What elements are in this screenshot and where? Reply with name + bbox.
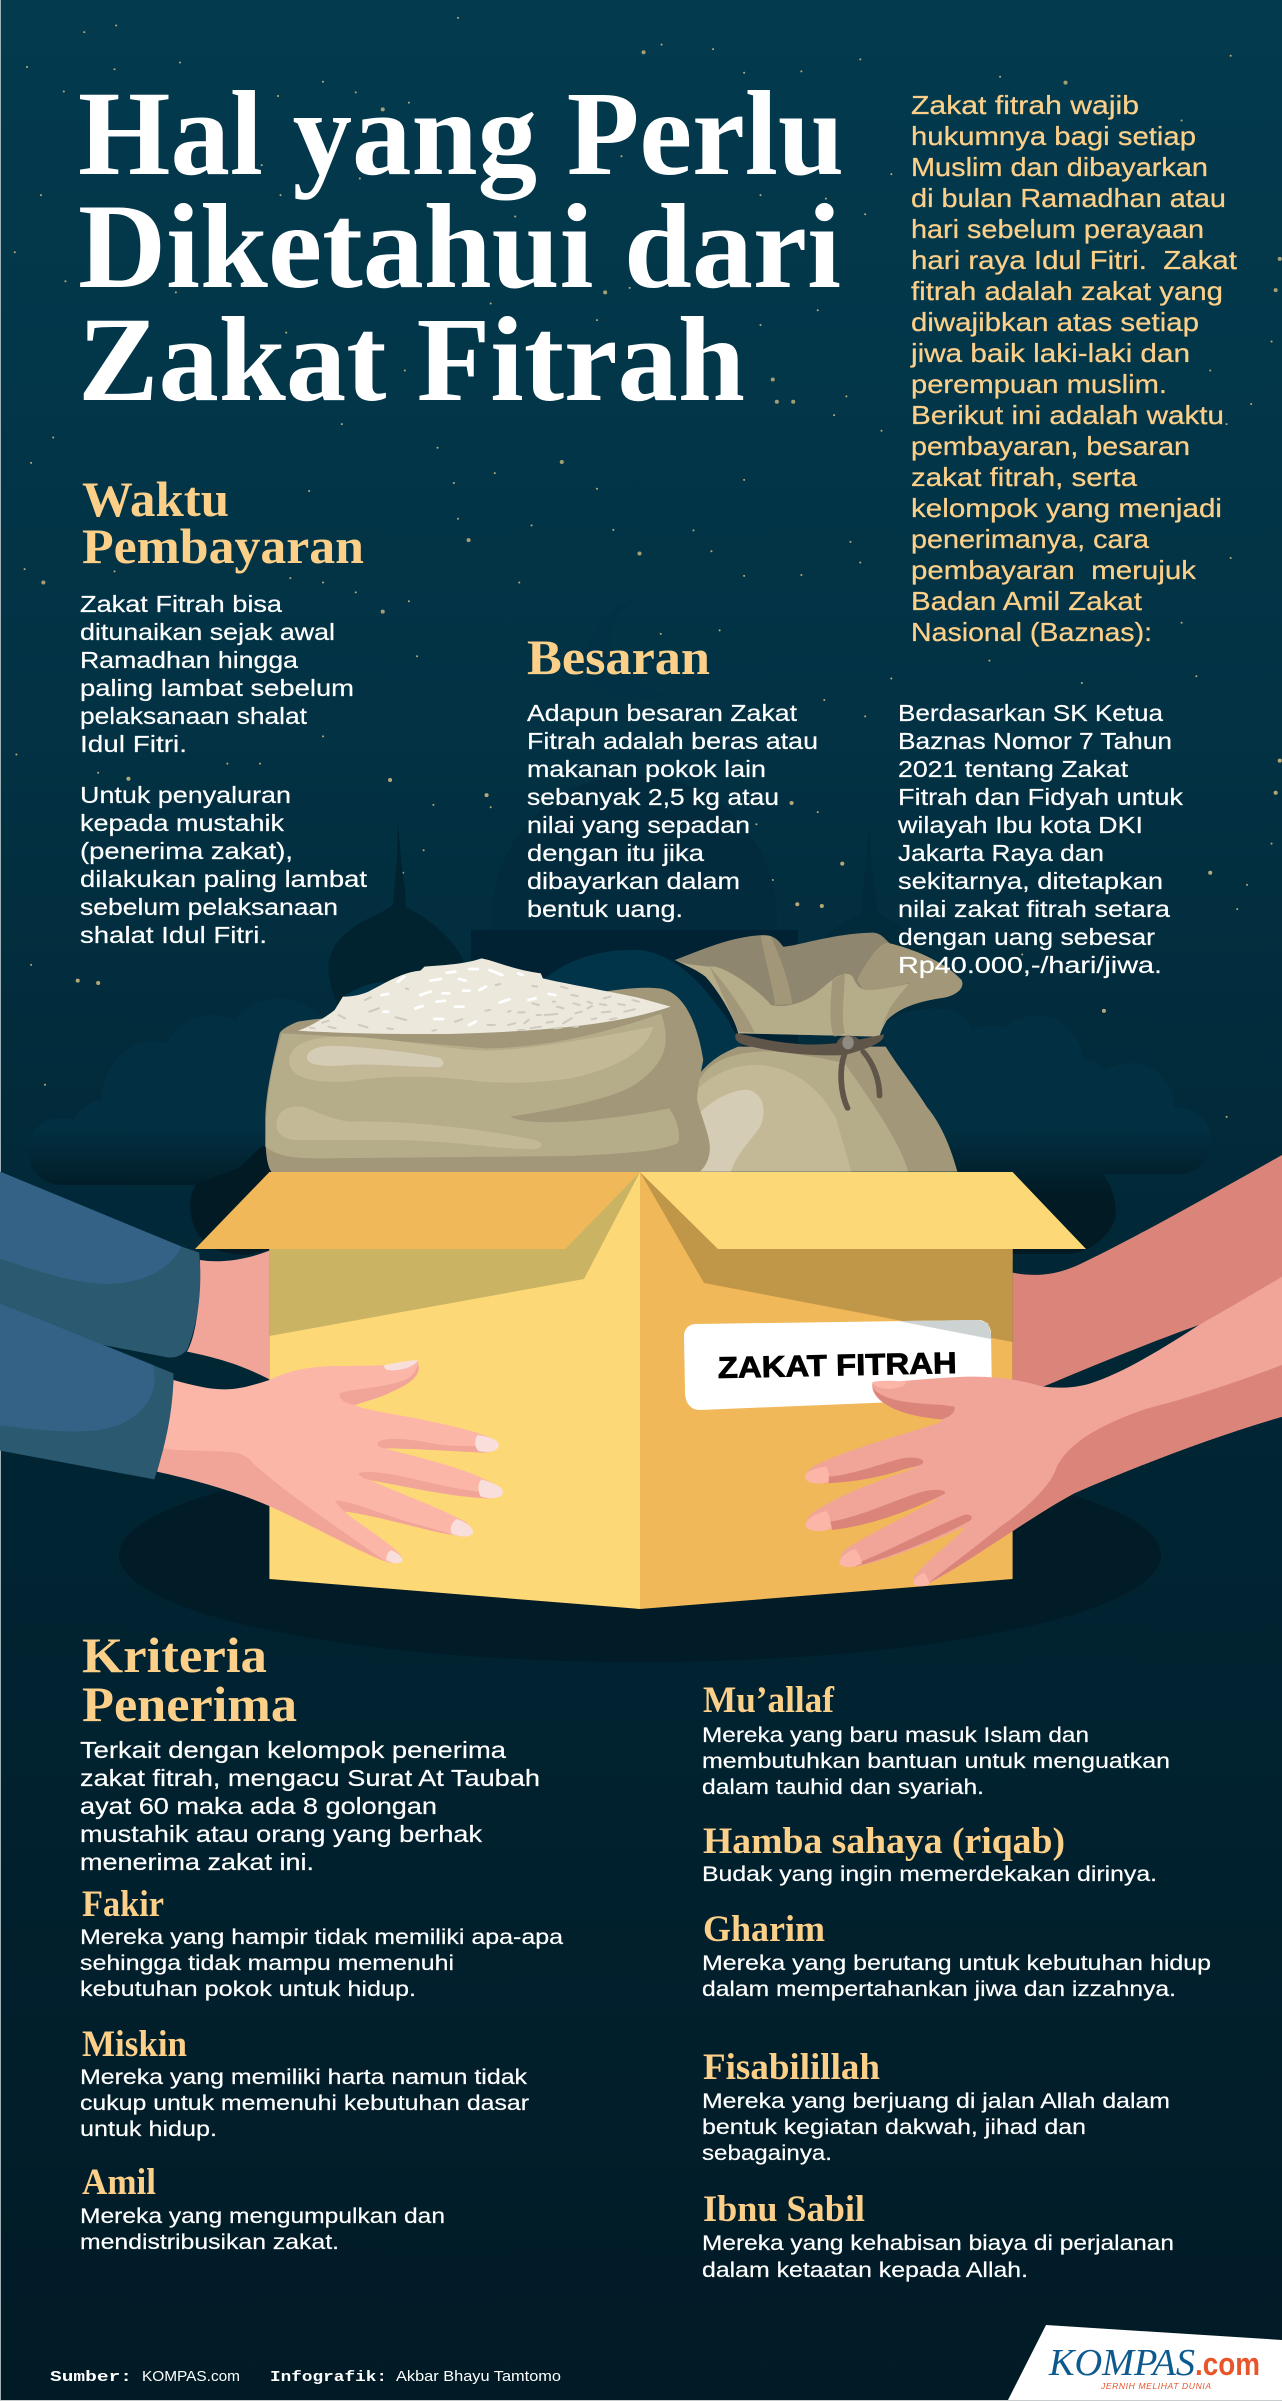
fisabilillah text: sebagainya. <box>702 2141 832 2165</box>
item: fisabilillah <box>702 2047 1170 2165</box>
illustration: tied sack <box>675 933 962 1172</box>
footer credits: Sumber: <box>50 2369 132 2386</box>
item: miskin <box>80 2024 529 2141</box>
box left face <box>269 1172 640 1609</box>
hand <box>157 1360 503 1563</box>
intro paragraph: penerimanya, cara <box>911 524 1150 554</box>
kompas logo: KOMPAS <box>1048 2342 1195 2384</box>
heading: Penerima <box>82 1676 297 1732</box>
right hand and arm <box>805 1277 1282 1586</box>
light cloud bump <box>330 950 750 1100</box>
kompas logo: JERNIH MELIHAT DUNIA <box>1100 2381 1211 2391</box>
intro paragraph: diwajibkan atas setiap <box>911 307 1199 337</box>
fakir text: sehingga tidak mampu memenuhi <box>80 1951 454 1975</box>
body: shalat Idul Fitri. <box>80 922 267 948</box>
illustration: rice sack <box>265 958 710 1172</box>
footer credits: KOMPAS.com <box>142 2368 240 2385</box>
body: Idul Fitri. <box>80 731 187 757</box>
clouds <box>29 950 1211 1255</box>
back arm right <box>1013 1155 1282 1387</box>
intro paragraph <box>910 90 1238 647</box>
intro paragraph: pembayaran merujuk <box>911 555 1197 585</box>
footer credits: Akbar Bhayu Tamtomo <box>396 2368 561 2385</box>
body: paling lambat sebelum <box>80 675 354 701</box>
section: nilai uang: nilai zakat fitrah setara <box>898 896 1171 922</box>
intro paragraph: fitrah adalah zakat yang <box>911 276 1223 306</box>
ibnu sabil text <box>702 2231 1174 2282</box>
item: ibnu sabil: Ibnu Sabil <box>703 2189 865 2230</box>
intro paragraph: pembayaran, besaran <box>911 431 1190 461</box>
body: dibayarkan dalam <box>527 868 740 894</box>
miskin text <box>80 2065 529 2141</box>
amil text <box>80 2204 445 2254</box>
intro paragraph: hukumnya bagi setiap <box>911 121 1196 151</box>
item: fakir <box>80 1884 563 2001</box>
gharim text <box>702 1951 1211 2001</box>
item: muallaf: Mu’allaf <box>703 1680 835 1721</box>
footer credits: Infografik: <box>270 2369 387 2386</box>
gharim text: Mereka yang berutang untuk kebutuhan hidup <box>702 1951 1211 1975</box>
fakir text: kebutuhan pokok untuk hidup. <box>80 1977 416 2001</box>
miskin text: Mereka yang memiliki harta namun tidak <box>80 2065 527 2089</box>
body: sebanyak 2,5 kg atau <box>527 784 779 810</box>
intro: zakat fitrah, mengacu Surat At Taubah <box>80 1765 540 1791</box>
item: amil <box>80 2162 445 2254</box>
intro paragraph: di bulan Ramadhan atau <box>911 183 1226 213</box>
heading: Waktu <box>82 471 229 527</box>
right dome <box>796 827 943 1012</box>
ibnu sabil text: dalam ketaatan kepada Allah. <box>702 2258 1028 2282</box>
kompas logo: .com <box>1195 2346 1260 2382</box>
body: ditunaikan sejak awal <box>80 619 335 645</box>
gharim text: dalam mempertahankan jiwa dan izzahnya. <box>702 1977 1176 2001</box>
item: miskin: Miskin <box>82 2024 187 2065</box>
fakir text: Mereka yang hampir tidak memiliki apa-apa <box>80 1925 563 1949</box>
heading: Pembayaran <box>82 518 364 574</box>
miskin text: cukup untuk memenuhi kebutuhan dasar <box>80 2091 529 2115</box>
rice pile <box>298 958 671 1034</box>
intro: mustahik atau orang yang berhak <box>80 1821 482 1847</box>
section: nilai uang: Jakarta Raya dan <box>898 840 1104 866</box>
section: nilai uang: Berdasarkan SK Ketua <box>898 700 1164 726</box>
body: bentuk uang. <box>527 896 683 922</box>
section: nilai uang <box>897 700 1183 978</box>
item: fakir: Fakir <box>82 1884 164 1925</box>
body: dengan itu jika <box>527 840 705 866</box>
section: nilai uang: Baznas Nomor 7 Tahun <box>898 728 1172 754</box>
intro: ayat 60 maka ada 8 golongan <box>80 1793 437 1819</box>
body: kepada mustahik <box>80 810 284 836</box>
body: Ramadhan hingga <box>80 647 299 673</box>
section: kriteria penerima <box>80 1627 540 1875</box>
section: nilai uang: sekitarnya, ditetapkan <box>898 868 1163 894</box>
title <box>78 67 844 427</box>
intro paragraph: hari raya Idul Fitri. Zakat <box>911 245 1238 275</box>
title: Zakat Fitrah <box>78 293 745 427</box>
box label <box>684 1320 992 1410</box>
fakir text <box>80 1925 563 2001</box>
fisabilillah text: bentuk kegiatan dakwah, jihad dan <box>702 2115 1086 2139</box>
left hand and sleeve <box>0 1172 503 1563</box>
item: hamba sahaya: Hamba sahaya (riqab) <box>703 1821 1065 1862</box>
item: hamba sahaya <box>702 1821 1157 1886</box>
intro paragraph: zakat fitrah, serta <box>911 462 1138 492</box>
intro paragraph: perempuan muslim. <box>911 369 1167 399</box>
muallaf text <box>702 1723 1170 1799</box>
shadow left <box>269 1172 640 1336</box>
left cloud <box>29 998 408 1255</box>
heading: Kriteria <box>82 1627 267 1683</box>
intro paragraph: Badan Amil Zakat <box>911 586 1143 616</box>
section: nilai uang: Fitrah dan Fidyah untuk <box>898 784 1183 810</box>
intro paragraph: Nasional (Baznas): <box>911 617 1152 647</box>
intro paragraph: kelompok yang menjadi <box>911 493 1222 523</box>
title: Hal yang Perlu <box>78 67 844 201</box>
box right face <box>640 1172 1013 1609</box>
body: dilakukan paling lambat <box>80 866 368 892</box>
intro: Terkait dengan kelompok penerima <box>80 1737 507 1763</box>
body: Adapun besaran Zakat <box>527 700 798 726</box>
amil text: Mereka yang mengumpulkan dan <box>80 2204 445 2228</box>
title: Diketahui dari <box>78 180 841 314</box>
intro: menerima zakat ini. <box>80 1849 314 1875</box>
body: (penerima zakat), <box>80 838 293 864</box>
fisabilillah text <box>702 2089 1170 2165</box>
body: nilai yang sepadan <box>527 812 750 838</box>
hamba sahaya text: Budak yang ingin memerdekakan dirinya. <box>702 1862 1157 1886</box>
lower sleeve <box>0 1303 173 1479</box>
item: muallaf <box>702 1680 1170 1799</box>
item: gharim <box>702 1909 1211 2001</box>
section: nilai uang: 2021 tentang Zakat <box>898 756 1129 782</box>
right flap <box>640 1172 1086 1249</box>
back arm left <box>187 1251 269 1379</box>
section: waktu pembayaran <box>80 471 368 948</box>
mosque silhouette <box>329 598 943 1070</box>
heading: Besaran <box>527 629 710 685</box>
body: pelaksanaan shalat <box>80 703 308 729</box>
footer credits <box>50 2368 561 2386</box>
section: nilai uang: dengan uang sebesar <box>898 924 1155 950</box>
body: Zakat Fitrah bisa <box>80 591 283 617</box>
right cloud <box>882 1008 1211 1254</box>
cardboard box <box>195 1172 1086 1609</box>
item: fisabilillah: Fisabilillah <box>703 2047 880 2088</box>
amil text: mendistribusikan zakat. <box>80 2230 339 2254</box>
central dome <box>492 775 777 930</box>
body: Untuk penyaluran <box>80 782 291 808</box>
fisabilillah text: Mereka yang berjuang di jalan Allah dalam <box>702 2089 1170 2113</box>
ground shadow ellipse <box>119 1448 1161 1662</box>
section: besaran <box>527 629 818 922</box>
muallaf text: dalam tauhid dan syariah. <box>702 1775 984 1799</box>
intro paragraph: Muslim dan dibayarkan <box>911 152 1208 182</box>
muallaf text: Mereka yang baru masuk Islam dan <box>702 1723 1089 1747</box>
heading <box>82 471 364 574</box>
intro <box>80 1737 540 1875</box>
left dome <box>329 822 471 1030</box>
ibnu sabil text: Mereka yang kehabisan biaya di perjalanan <box>702 2231 1174 2255</box>
kompas logo <box>1008 2325 1282 2400</box>
left flap <box>195 1172 640 1249</box>
item: ibnu sabil <box>702 2189 1174 2282</box>
section: nilai uang: wilayah Ibu kota DKI <box>897 812 1143 838</box>
body: sebelum pelaksanaan <box>80 894 338 920</box>
heading <box>82 1627 297 1732</box>
item: amil: Amil <box>82 2162 156 2203</box>
intro paragraph: jiwa baik laki-laki dan <box>910 338 1190 368</box>
starry sky <box>15 18 1280 1133</box>
upper sleeve <box>0 1172 200 1358</box>
intro paragraph: hari sebelum perayaan <box>911 214 1204 244</box>
miskin text: untuk hidup. <box>80 2117 217 2141</box>
body <box>527 700 818 922</box>
section: nilai uang: Rp40.000,-/hari/jiwa. <box>898 952 1162 978</box>
box label: ZAKAT FITRAH <box>717 1347 957 1385</box>
intro paragraph: Berikut ini adalah waktu <box>911 400 1224 430</box>
body: makanan pokok lain <box>527 756 766 782</box>
central base <box>471 930 798 1070</box>
crescent moon <box>585 598 680 699</box>
body <box>80 591 368 948</box>
item: gharim: Gharim <box>703 1909 825 1950</box>
shadow right <box>640 1172 1013 1342</box>
rope <box>735 1033 884 1108</box>
body: Fitrah adalah beras atau <box>527 728 818 754</box>
intro paragraph: Zakat fitrah wajib <box>911 90 1139 120</box>
muallaf text: membutuhkan bantuan untuk menguatkan <box>702 1749 1170 1773</box>
